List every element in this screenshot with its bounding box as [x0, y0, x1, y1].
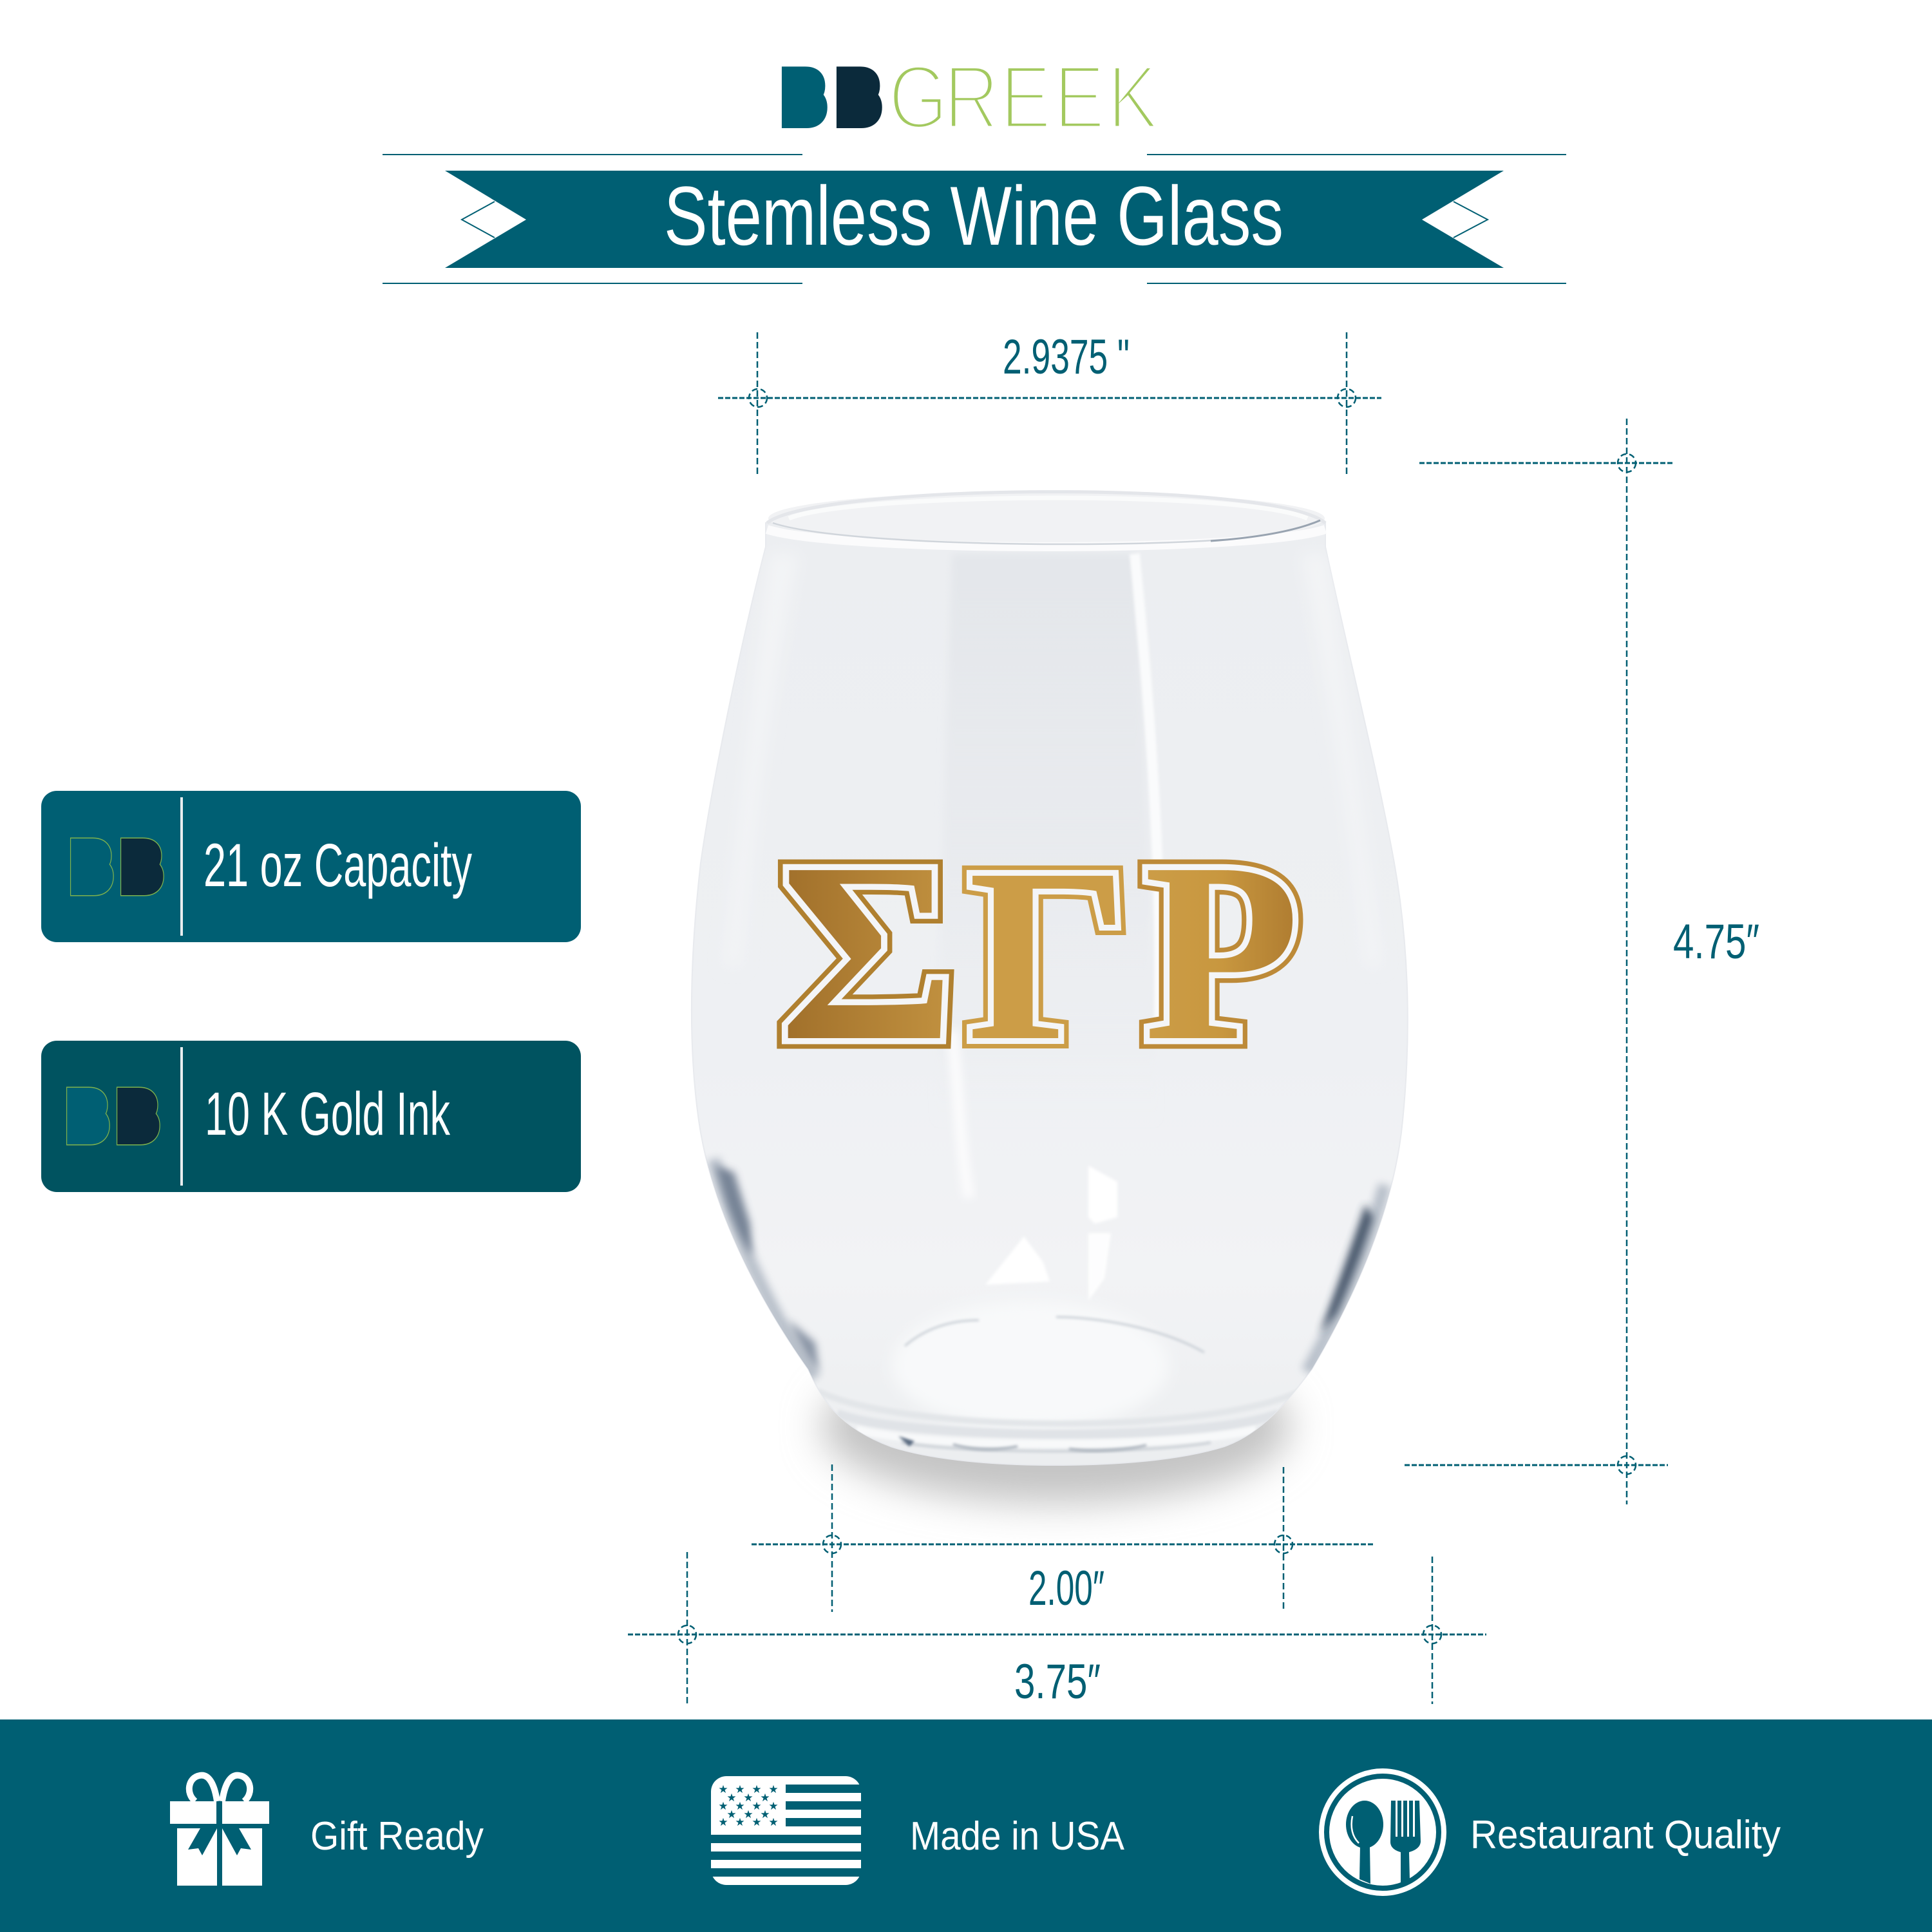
dimension: height: [1405, 419, 1759, 1504]
rim width label: 2.9375 ": [1003, 330, 1130, 384]
icon: usa flag: ★: [752, 1783, 762, 1796]
icon: usa flag: ★: [752, 1800, 762, 1813]
icon: usa flag: ★: [735, 1783, 745, 1796]
letter gamma: Γ: [968, 817, 1129, 1092]
panel: footer features: [0, 1719, 1932, 1932]
base width label: 2.00″: [1028, 1561, 1104, 1616]
letter gamma: Γ: [968, 817, 1129, 1092]
left diamond accent: [462, 202, 495, 238]
pill logo mark: [73, 831, 160, 902]
icon: usa flag: ★: [768, 1783, 779, 1796]
diameter label: 3.75″: [1014, 1654, 1101, 1709]
pill divider: [180, 797, 183, 936]
rim width dashed guides: [718, 332, 1381, 475]
icon: usa flag: ★: [726, 1808, 737, 1821]
icon: usa flag: [711, 1776, 861, 1885]
dimension: max diameter: [628, 1552, 1486, 1709]
glass rim: [768, 491, 1325, 545]
logo word: GREEK: GREEK: [889, 46, 1159, 147]
pill logo mark: B: [119, 1081, 156, 1151]
pill logo mark: B: [69, 1081, 106, 1151]
product photo: stemless wine glass: [692, 491, 1408, 1465]
right diamond accent: [1454, 202, 1488, 238]
pill text: 21 oz Capacity: [204, 831, 472, 900]
logo mark: first B: B: [784, 61, 824, 135]
banner ribbon: [445, 171, 1504, 268]
logo mark: second B: B: [839, 61, 878, 135]
pill logo mark: [69, 1081, 156, 1151]
icon: usa flag: ★: [735, 1800, 745, 1813]
letter gamma: Γ: [968, 817, 1129, 1092]
letter rho: Ρ: [1144, 810, 1300, 1094]
diameter dashed guides: [628, 1552, 1486, 1704]
gift label: Gift Ready: [310, 1814, 484, 1859]
icon: usa flag: ★: [718, 1800, 728, 1813]
base width dashed guides: [752, 1464, 1374, 1612]
pill logo mark: B: [123, 831, 160, 902]
icon: usa flag: ★: [718, 1816, 728, 1829]
pill divider: [180, 1047, 183, 1186]
title banner: [445, 169, 1504, 268]
icon: usa flag: ★: [768, 1800, 779, 1813]
icon: usa flag: ★: [735, 1816, 745, 1829]
pill logo mark: B: [73, 831, 110, 902]
glass body: [692, 523, 1408, 1465]
pill logo mark: B: [69, 1081, 106, 1151]
height label: 4.75″: [1673, 914, 1759, 969]
letter sigma: Σ: [779, 810, 955, 1094]
pill background: [41, 1041, 581, 1192]
letter rho: Ρ: [1144, 810, 1300, 1094]
icon: usa flag: ★: [760, 1808, 770, 1821]
title rule lines: [383, 155, 1566, 283]
glass reflections: [714, 554, 1385, 1452]
pill text: 10 K Gold Ink: [205, 1080, 450, 1148]
panel: capacity pill: [41, 791, 581, 942]
footer band: [0, 1719, 1932, 1932]
usa label: Made in USA: [910, 1814, 1125, 1859]
icon: usa flag: ★: [726, 1792, 737, 1804]
glass shadow: [821, 1349, 1291, 1504]
pill logo mark: B: [73, 831, 110, 902]
icon: usa flag: ★: [743, 1792, 753, 1804]
imprint: gold Greek letters: [779, 810, 1300, 1094]
dimension: rim width: [718, 330, 1381, 475]
icon: usa flag: ★: [768, 1816, 779, 1829]
pill background: [41, 791, 581, 942]
title text: Stemless Wine Glass: [664, 169, 1283, 263]
icon: usa flag: ★: [743, 1808, 753, 1821]
icon: usa flag: ★: [752, 1816, 762, 1829]
height dashed guides: [1405, 419, 1673, 1504]
restaurant label: Restaurant Quality: [1470, 1813, 1781, 1857]
pill logo mark: B: [119, 1081, 156, 1151]
icon: usa flag: ★: [760, 1792, 770, 1804]
logo: BB Greek: [784, 46, 1159, 147]
letter sigma: Σ: [779, 810, 955, 1094]
letter sigma: Σ: [779, 810, 955, 1094]
icon: usa flag: ★: [718, 1783, 728, 1796]
panel: gold ink pill: [41, 1041, 581, 1192]
icon: plate and cutlery: [1321, 1771, 1444, 1893]
icon: gift: [170, 1776, 269, 1886]
pill logo mark: B: [123, 831, 160, 902]
letter rho: Ρ: [1144, 810, 1300, 1094]
dimension: base width: [752, 1464, 1374, 1616]
